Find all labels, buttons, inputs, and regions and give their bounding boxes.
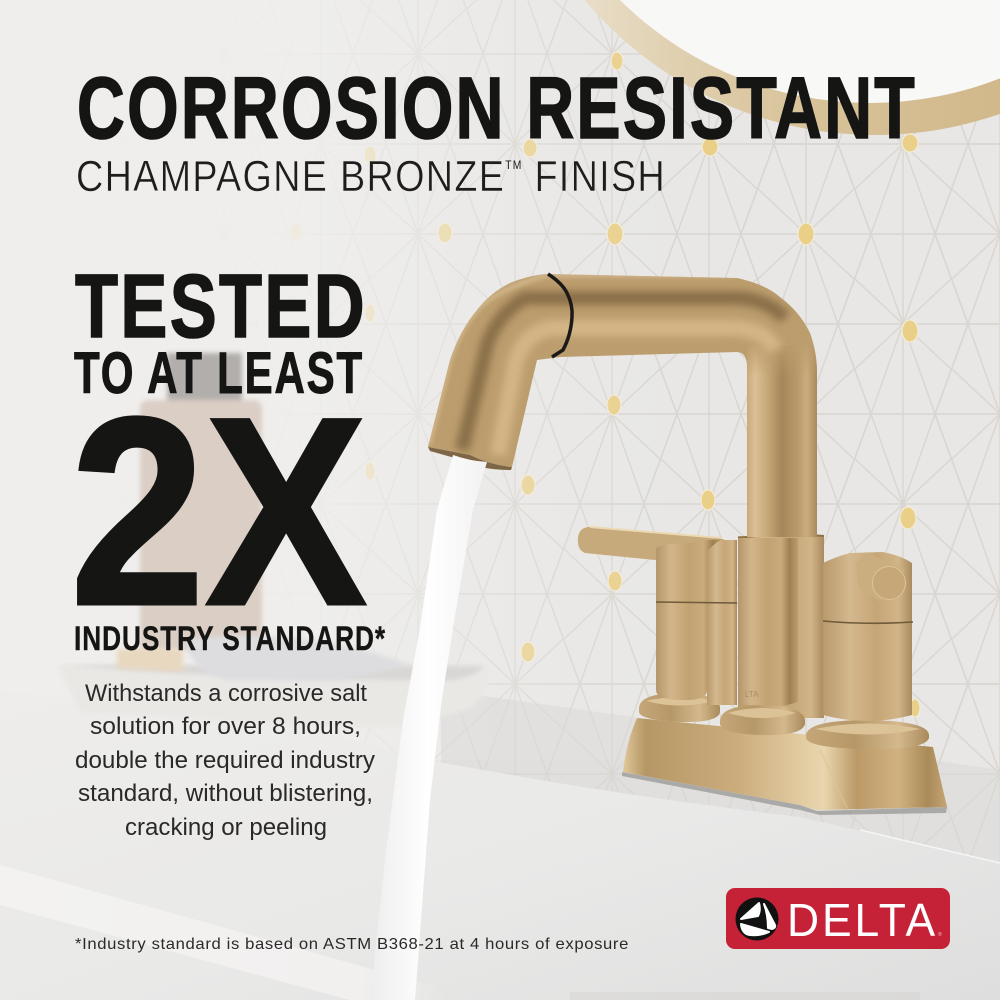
body text: standard, without blistering, — [78, 780, 373, 807]
subtitle: CHAMPAGNE BRONZE — [76, 152, 576, 201]
center disc — [720, 705, 805, 735]
right disc — [806, 720, 929, 749]
headline: tested: TESTED — [75, 257, 367, 357]
left disc — [639, 693, 720, 722]
soap dish — [57, 636, 489, 727]
right handle — [823, 552, 913, 721]
subtitle: TM — [505, 158, 523, 172]
spout arm and nozzle — [428, 274, 817, 540]
registered mark: ® — [938, 931, 942, 938]
body text: cracking or peeling — [125, 814, 327, 841]
faucet — [428, 274, 947, 815]
center column — [738, 534, 824, 718]
Delta logo — [726, 888, 950, 949]
headline: industry standard: INDUSTRY STANDARD* — [74, 620, 386, 658]
counter top reflection — [441, 690, 1000, 870]
icon: delta triangle — [741, 903, 775, 935]
footnote: *Industry standard is based on ASTM B368-21 at 4 hours of exposure — [75, 936, 629, 953]
left white haze — [0, 0, 1000, 760]
body text — [75, 680, 375, 841]
mirror — [495, 0, 1000, 135]
headline: 2X: 2X — [70, 361, 368, 661]
black ring — [548, 274, 572, 357]
faucet base with gasket — [622, 718, 947, 815]
logo wordmark: DELTA — [787, 894, 938, 946]
body text: solution for over 8 hours, — [90, 713, 361, 740]
embossed logo text: LTA — [745, 690, 759, 699]
left handle — [578, 527, 737, 705]
subtitle: FINISH — [523, 152, 666, 201]
body text: double the required industry — [75, 747, 375, 774]
sink basin — [0, 690, 1000, 1000]
headline: to at least: TO AT LEAST — [74, 341, 364, 406]
blurred bottle — [140, 353, 262, 650]
water stream — [370, 455, 487, 1000]
body text: Withstands a corrosive salt — [85, 680, 367, 707]
